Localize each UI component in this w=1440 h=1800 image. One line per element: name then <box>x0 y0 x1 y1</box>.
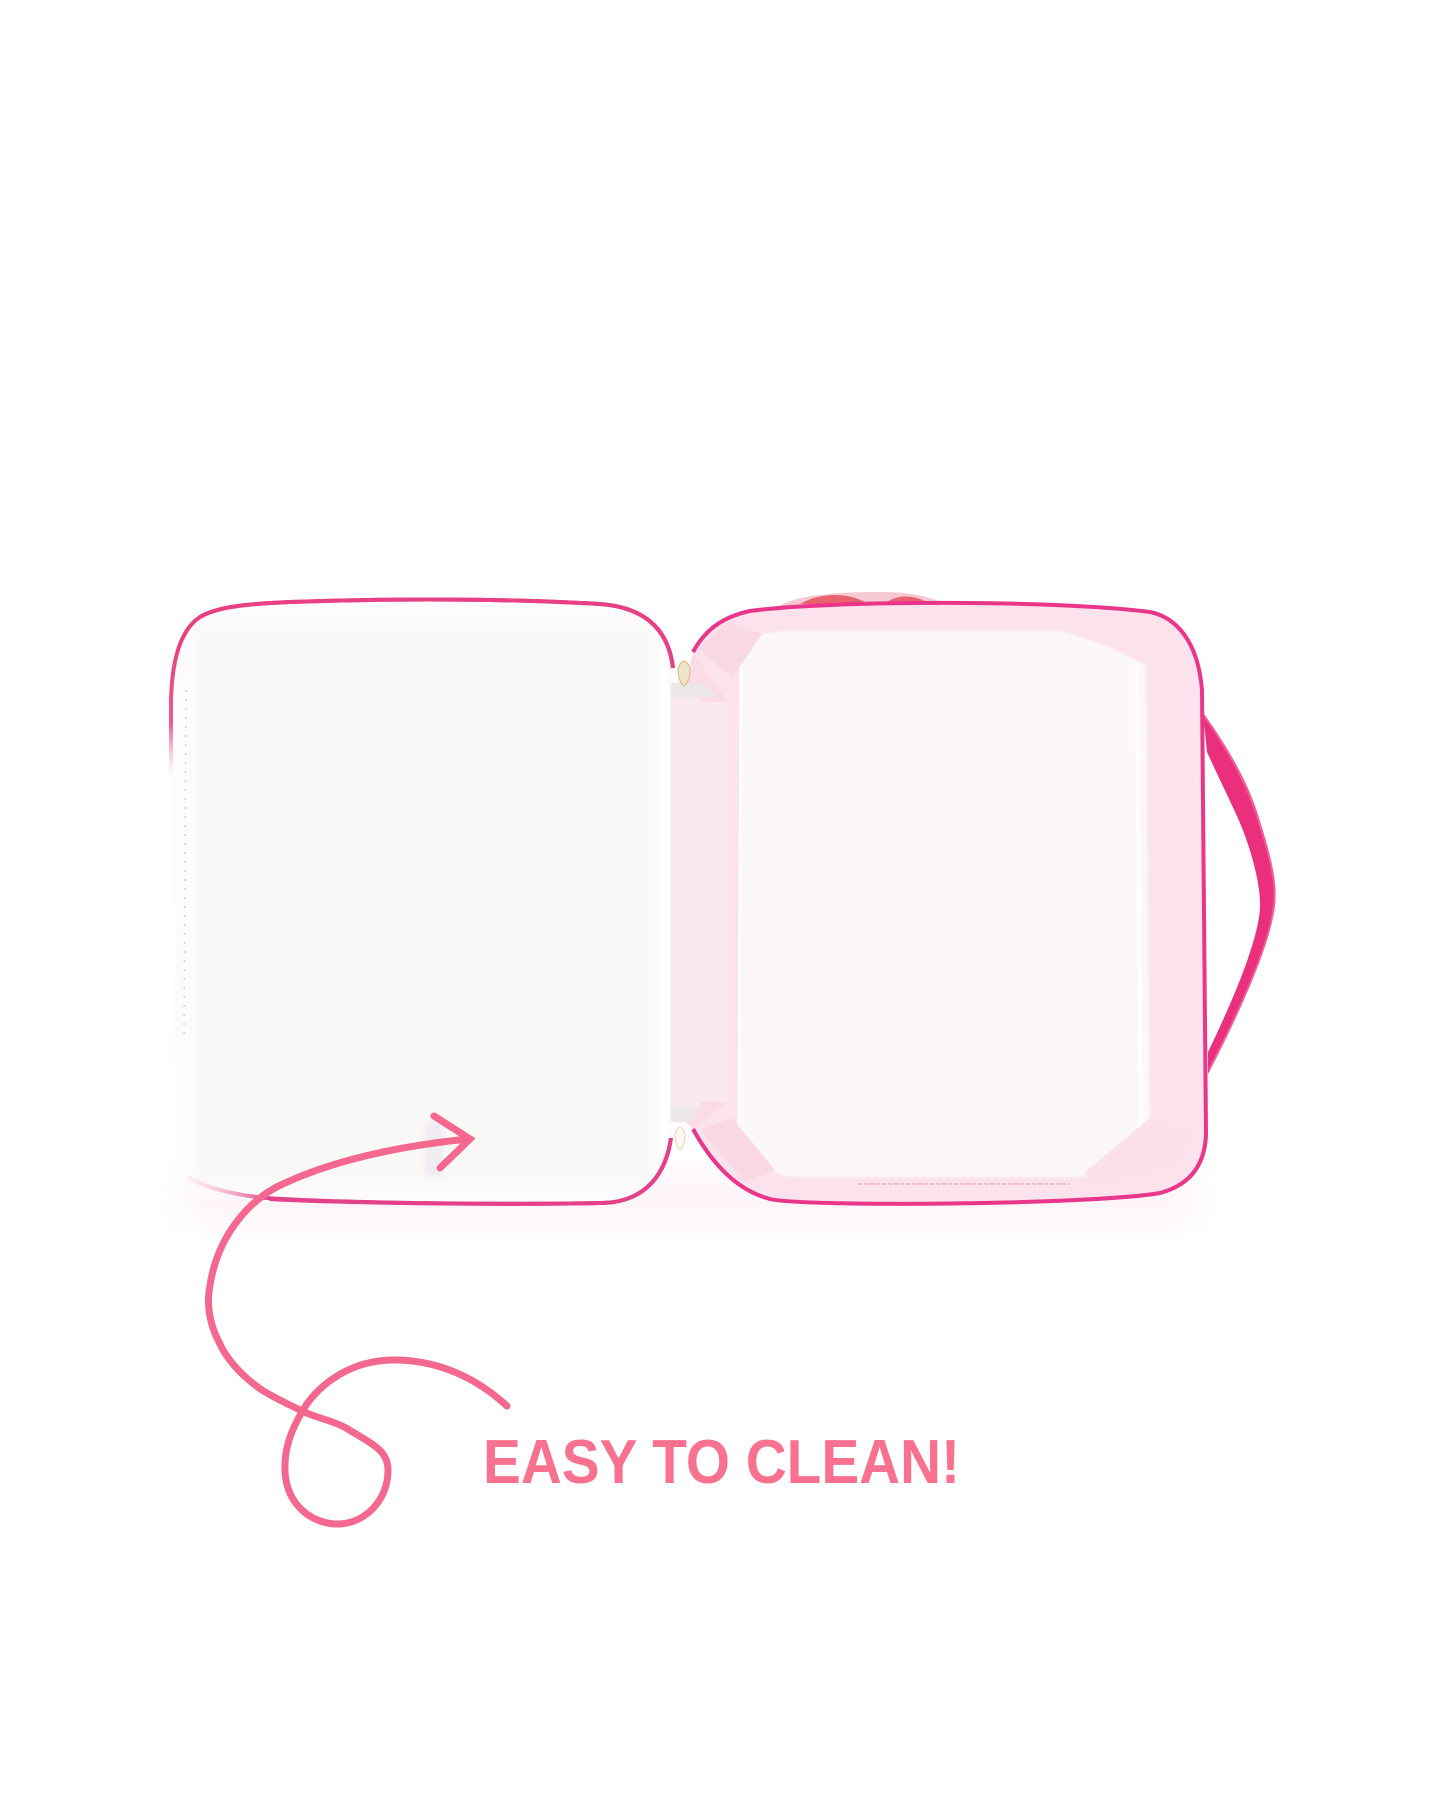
zipper pulls <box>675 661 690 1150</box>
lining <box>693 603 1206 1204</box>
handle <box>1203 713 1276 1074</box>
centre gusset: pink lining <box>668 652 728 1129</box>
curly arrow pointing to the lining <box>208 1116 507 1524</box>
right panel zipper <box>693 603 1206 1204</box>
floral fabric peek <box>772 592 950 612</box>
product: open pink lunch bag <box>171 592 1276 1204</box>
left panel: white wipeable lining <box>171 600 673 1204</box>
caption: EASY TO CLEAN! <box>483 1428 960 1497</box>
right panel: pink lining with clear window <box>693 592 1276 1204</box>
care label <box>425 1122 443 1176</box>
corner straps <box>698 622 762 678</box>
clear vinyl window <box>740 631 1150 1177</box>
left panel zipper <box>171 600 673 780</box>
